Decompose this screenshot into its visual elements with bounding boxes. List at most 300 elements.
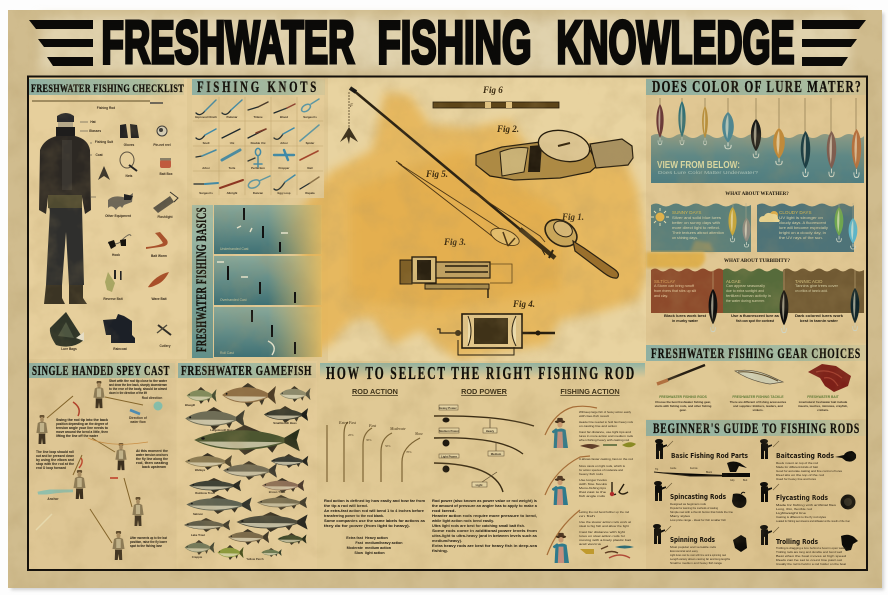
small labels (47, 396, 162, 501)
baitcasting rods: Reel sits on the top of the rod (776, 473, 824, 477)
fig 6 ferrule: Fig 6 (482, 85, 503, 95)
knot names: Egg Loop (278, 191, 291, 195)
fishing action figure 1 (545, 406, 636, 449)
chart: rod power curves: Heavy Power (439, 406, 458, 410)
fishing action figure 2: Use longer hooks (579, 478, 608, 482)
flycasting rods: Made for fishing with artificial flies (776, 503, 837, 507)
icon: flashlight (153, 192, 178, 219)
cloudy days text (779, 210, 828, 240)
angler callouts: Glasses (89, 129, 101, 133)
step 1 text: down in the direction of the lift (109, 391, 148, 395)
step 5 text: spot to the fishing lane (130, 544, 162, 548)
icon: raincoat: Raincoat (113, 347, 128, 351)
icon: lure: There are different of fishing accessories (730, 400, 787, 404)
panel: freshwater fishing checklist (29, 78, 187, 359)
background (319, 361, 646, 570)
spinning rods (670, 535, 747, 565)
icon: red bait: Live/natural freshwater bait include (799, 400, 848, 404)
fishing action figure 3: Use the slower action rods work at (579, 520, 631, 524)
chart: rod action curves: 70% (406, 450, 412, 454)
panel: freshwater gamefish (177, 361, 317, 570)
silt/clay text: from rivers that stirs up silt (654, 289, 696, 293)
sunny days text: Their textures attract attention (672, 231, 724, 235)
spincasting rods: Low price range - Ideal for fish smaller fish (670, 518, 726, 522)
icon: cutlery (157, 325, 171, 348)
knot names: Surgeon's (199, 191, 213, 195)
knot names: Arbor (280, 141, 289, 145)
icon: lure bag (50, 312, 84, 351)
chart: rod action curves: Moderate (389, 426, 406, 431)
sunny days text: Silver and solid blue lures (672, 216, 721, 220)
title text (102, 9, 794, 76)
tannic acid text: Tannins give trees cover (795, 284, 839, 288)
icon: other equipment: Other Equipment (105, 214, 132, 218)
fig 3 cross section: Fig 3. (443, 237, 466, 247)
icon: cutlery: Cutlery (160, 344, 171, 348)
fishing action figure 2: fish angle rods (579, 494, 606, 498)
fish chart: Crappie (192, 555, 203, 559)
knot names: Duncan (253, 191, 263, 195)
heading bar (646, 420, 866, 436)
fish chart: Rainbow Trout (195, 491, 215, 495)
icon: hook: Hook (112, 253, 120, 257)
trolling rods: Trolling is dragging a lure behind a boat in open water (776, 546, 846, 550)
fishing action figure 2: heavy fish rods (579, 472, 604, 476)
weather panel (651, 203, 857, 252)
sunny days text (672, 210, 724, 240)
step 3 text (36, 450, 75, 470)
heading bar (646, 345, 866, 361)
frame (28, 76, 867, 570)
trolling rods: Reels can be set to count line paid out (776, 558, 842, 562)
chart: rod action curves: Extra Fast (338, 420, 357, 425)
icon: rod (655, 365, 712, 412)
cloudy days text: UV light is stronger on (779, 216, 823, 220)
fish chart: Yellow Perch (246, 557, 264, 561)
trolling rods: Best when the boat moves at high speed (776, 554, 846, 558)
fig 6 ferrule (433, 85, 559, 108)
icon: reel (153, 126, 171, 147)
turbidity captions: Use a fluorescent lure as (731, 314, 779, 318)
fishing action figure 1: Heavier line needed to hold fast heavy rods (579, 420, 633, 424)
baitcasting rods: Made for different kinds of bait (776, 465, 818, 469)
orange stain (300, 92, 648, 360)
lures: cloudy (835, 203, 857, 249)
spinning rods: Economical and easy (670, 549, 698, 553)
step 1 text: and draw the line back, sharply downstream (109, 383, 168, 387)
fishing action figure 1: when fishing heavy with casting rod (579, 438, 629, 442)
right chevrons (802, 20, 866, 66)
title text: FRESHWATER (102, 9, 354, 76)
turbidity captions (664, 314, 844, 323)
step 4 text: water tension anchors (135, 453, 168, 457)
casting anglers (36, 381, 144, 560)
rod power text: ultra-light to ultra-heavy (and in between levels such as (432, 534, 537, 538)
silt/clay text (654, 279, 696, 298)
hook line and sinker (340, 92, 358, 144)
sunny days text: better on sunny days with (672, 221, 720, 225)
step 2 text: move around the bend a little, then (56, 430, 109, 434)
heading: SINGLE HANDED SPEY CAST (32, 363, 170, 378)
main rod, fig 1 (350, 88, 618, 278)
knot names: Spider (306, 141, 315, 145)
background (29, 361, 176, 570)
title text: FISHING (378, 9, 532, 76)
knot names: Palomar (226, 115, 238, 119)
fishing action figure 1: Cast far distance, use light tips and (579, 430, 631, 434)
fishing action figure 3 (547, 510, 634, 563)
knot names: Rapala (305, 191, 315, 195)
tannic acid text: TANNIC ACID (795, 279, 822, 284)
knot names: Nail (307, 166, 313, 170)
icon: bait box: Bait Box (160, 172, 173, 176)
icon: cloud (759, 211, 780, 222)
fig 2 reel (476, 124, 633, 180)
rod action text: medium/heavy action (365, 541, 403, 545)
icon: lure bag: Lure Bags (61, 347, 77, 351)
basic fishing rod parts: Guide (670, 467, 677, 470)
icon: sun (651, 208, 669, 226)
fishing action figure 2: Mono-fishing tips (579, 486, 607, 490)
spincasting rods (670, 492, 746, 522)
angler callouts: Coat (95, 153, 103, 157)
cast scene 2 (214, 256, 322, 305)
rod power text: fishing. (432, 549, 448, 553)
chart: rod power curves: Light (476, 483, 482, 487)
icon: rod: Choose the best freshwater fishing gear, (655, 400, 711, 404)
background (646, 78, 867, 343)
turbidity captions: Black lures work best (664, 314, 707, 318)
icon: lure fly (98, 166, 110, 180)
trolling rods (776, 535, 858, 566)
icon: rod: gear. (680, 408, 687, 412)
cast scene 3 (214, 307, 322, 357)
basic fishing rod parts: Basic Fishing Rod Parts (671, 451, 748, 460)
icon: raincoat (103, 314, 135, 351)
background (646, 343, 867, 419)
fig 5 line: Fig 5. (425, 169, 448, 179)
background (177, 361, 317, 570)
rod power text: while light action rods bend easily. (431, 519, 494, 523)
spincasting rods: Spincasting Rods (670, 492, 726, 501)
heading: FRESHWATER FISHING CHECKLIST (31, 83, 184, 95)
fishing action figure 2: with fine hooks (579, 482, 608, 486)
chart: rod power curves: Heavy (486, 429, 495, 433)
rod power text: the amount of pressure an angler has to apply to make a (432, 504, 538, 508)
baitcasting rods: Used for heavy line and lures (776, 477, 817, 481)
fishing rod (32, 101, 163, 110)
knot names: Albright (227, 191, 237, 195)
knot names: Trilene (253, 115, 263, 119)
rod action text: Some companies use the same labels for actions as (324, 519, 425, 523)
icon: gloves (120, 124, 139, 147)
chart: rod action curves: 50% (385, 444, 391, 448)
cast path markers (36, 402, 162, 530)
small labels: water flow (129, 420, 146, 424)
water view from below (651, 134, 864, 183)
sunny days text: on shining days. (672, 236, 698, 240)
fish chart: Lake Trout (191, 533, 205, 537)
rod action text (324, 499, 426, 555)
step 3 text: end O loop forward (36, 466, 67, 470)
spinning rods: Small to medium and heavy fish range (670, 561, 722, 565)
fishing action figure 1: lures in more action and medium rods (579, 434, 634, 438)
chart: rod power curves: Medium (491, 452, 502, 456)
icon: red bait: FRESHWATER BAIT (807, 395, 839, 399)
cloudy days text: the UV rays of the sun. (779, 236, 823, 240)
stain on turbidity gap (646, 252, 705, 268)
cloudy days text: CLOUDY DAYS (779, 210, 812, 215)
column headings: FISHING ACTION (560, 387, 620, 396)
heading bar (646, 79, 866, 95)
step 3 text: by using the elbow and (36, 458, 75, 462)
tannic acid text: on critics of tannic acid. (795, 289, 828, 293)
spincasting rods: Popular for learning the methods of casting (670, 506, 718, 510)
sunny days text: more direct light to reflect. (672, 226, 720, 230)
chart: rod power curves: Medium Power (439, 429, 460, 433)
title banner (29, 9, 866, 76)
step 4 text (135, 449, 168, 469)
step 2 text: lifting the line off the water (56, 434, 98, 438)
fish chart (184, 383, 310, 561)
knot names: Blood (280, 115, 288, 119)
hook line and sinker: F (349, 104, 354, 109)
step 3 text: stop with the rod at the (36, 462, 74, 466)
knot names: Snell (203, 141, 210, 145)
icon: bait worm (146, 232, 168, 258)
view from below text: VIEW FROM BELOW: (657, 160, 740, 171)
knot names: Surgeon's (303, 115, 317, 119)
cast scene 3: Roll Cast (220, 351, 234, 355)
basic fishing rod parts: Ferrule (690, 467, 698, 470)
cloudy days text: bright on a cloudy day, in (779, 231, 826, 235)
heading bar (178, 363, 316, 378)
flycasting rods: Flycasting Rods (776, 493, 828, 502)
rod action text: Slow (354, 551, 363, 555)
fish chart: Walleye (195, 468, 206, 472)
silt/clay text: and clay. (654, 294, 668, 298)
black lures (709, 270, 859, 333)
icon: rod: starts with fishing rods, and other fishing (655, 404, 712, 408)
chart: rod power curves (434, 405, 534, 492)
rod power text: Extra heavy rods are best for heavy fish in deep-sea (432, 544, 538, 548)
fig 1 caption: Fig 1. (561, 212, 584, 222)
turbidity panel (651, 268, 864, 333)
turbidity captions: Dark colored lures work (795, 314, 844, 318)
baitcasting rods (776, 451, 856, 481)
background (29, 78, 187, 359)
left chevrons (29, 20, 93, 66)
icon: red bait: insects, leeches, minnows, crayfish, (798, 404, 848, 408)
step 5 text: position, raise the fly lower (130, 540, 167, 544)
knot names (195, 115, 317, 195)
fig 4 spool (437, 299, 555, 355)
algae text: ALGAE (726, 279, 741, 284)
baitcasting rods: Reels mount on top of the rod (776, 461, 818, 465)
icon: lure (730, 370, 787, 412)
fishing action figure 3: on fish (579, 514, 596, 518)
fishing action figure 1: on casting line and action (579, 424, 617, 428)
rod action text: transferring power to the rod blank. (324, 514, 384, 518)
panel: how to select the right fishing rod (319, 361, 646, 570)
rod power text: Some rods come in additional power levels from (432, 529, 538, 533)
fishing action figure 3: ideal to big fish and allow the fight (579, 524, 629, 528)
rod action text: Extra fast (346, 536, 364, 540)
fig 4 spool: Fig 4. (512, 299, 535, 309)
step 3 text: The line loop should roll (36, 450, 74, 454)
icon: reverse bait (103, 270, 124, 301)
icon: wave bait (148, 272, 169, 301)
small labels: Direction of (129, 416, 148, 420)
fishing rod: Fishing Rod (97, 106, 115, 110)
step 3 text: out and be pressed down (36, 454, 75, 458)
panel: single handed spey cast (29, 361, 176, 570)
step 2 text: position depending on the degree of (56, 422, 109, 426)
knot names: Improved Clinch (195, 115, 217, 119)
fish chart: Smallmouth Bass (273, 421, 297, 425)
trolling rods: Trolling Rods (776, 537, 818, 546)
fishing action figure 3: lures on slow action rods for (579, 534, 625, 538)
panel: beginner's guide to fishing rods (646, 419, 867, 570)
fish chart: Bluegill (185, 403, 195, 407)
heading: FISHING KNOTS (197, 79, 319, 96)
icon: reverse bait: Reverse Bait (103, 297, 124, 301)
turbidity captions: best in tannin water (800, 319, 839, 323)
rod action text: Fast (355, 541, 364, 545)
basic fishing rod parts: Grip (730, 479, 735, 482)
fish chart: Largemouth Bass (210, 428, 234, 432)
step 4 text: the fly line along the (136, 457, 168, 461)
view from below text (657, 160, 758, 176)
turbidity captions: fish can spot the contrast (736, 319, 775, 323)
basic fishing rod parts (654, 451, 750, 482)
icon: lure: FRESHWATER FISHING TACKLE (732, 395, 784, 399)
step 5 text: After moments up to the last (130, 536, 168, 540)
icon: reel: Pin-net reel (153, 143, 171, 147)
knot names: Double Uni (251, 141, 266, 145)
icon: rod: FRESHWATER FISHING RODS (659, 395, 708, 399)
trolling rods: Trolling rods are long and durable and bend well (776, 550, 842, 554)
heading bar (320, 363, 645, 378)
vertical heading: FRESHWATER FISHING BASICS (194, 207, 210, 352)
heading bar (29, 363, 175, 378)
rod action text: the tip a rod will bend. (324, 504, 368, 508)
step 2 text (56, 418, 109, 438)
spincasting rods: Many styles (670, 514, 691, 518)
chart: rod power curves: Light Power (441, 454, 458, 458)
knot names: Arbor (202, 166, 211, 170)
rod action text: medium action (365, 546, 392, 550)
cast scene 1 (214, 205, 322, 254)
column headings: ROD ACTION (352, 387, 398, 396)
rod power text: Heavier action rods require more pressure to bend, (432, 514, 537, 518)
fishing action figure 3: and worms (579, 542, 602, 546)
rod action text: they do for power (from light to heavy). (324, 524, 410, 528)
fig 2 reel: Fig 2. (496, 124, 519, 134)
fig 5 line (396, 161, 545, 249)
algae text: Can appear seasonally (726, 284, 765, 288)
fishing action figure 1: Will keep large fish of heavy action easily (579, 410, 631, 414)
spinning rods: Light lures can be cast with line and a spinning reel (670, 553, 726, 557)
chart: rod action curves (327, 420, 423, 482)
fish chart: Brown Trout (269, 490, 285, 494)
rod action text: light action (365, 551, 385, 555)
trolling rods: Usually the rod is held in a rod holder on the boat (776, 562, 846, 566)
sunny days text: SUNNY DAYS (672, 210, 701, 215)
rod power text: rod bend. (432, 509, 456, 513)
knot names: Perfection (251, 166, 265, 170)
flycasting rods: Lightweight line (776, 511, 806, 515)
fishing action figure 3: moving with a lively plastic bait (579, 538, 631, 542)
heading bar (29, 79, 184, 95)
panel: freshwater fishing gear choices (646, 343, 867, 419)
silhouettes of anglers (653, 439, 779, 545)
step 4 text: back upstream (142, 465, 167, 469)
icon: bait box (160, 158, 173, 176)
step 4 text: rod, then casting (136, 461, 168, 465)
tannic acid text (795, 279, 839, 293)
cloudy days text: lure will become especially (779, 226, 828, 230)
fishing action figure 2: for action species of moderate and (579, 468, 623, 472)
heading: FRESHWATER GAMEFISH (181, 363, 312, 378)
algae text: due to extra sunlight and (726, 289, 764, 293)
silt/clay text: A Storm can bring runoff (654, 284, 694, 288)
chart: rod action curves: Slow (415, 431, 423, 436)
spinning rods: Most popular and versatile rods (670, 545, 717, 549)
fishing action figure 2: More casts on light rods, which is (579, 464, 626, 468)
algae text (726, 279, 771, 303)
column headings: ROD POWER (461, 387, 508, 396)
panel: fishing knots (192, 78, 325, 198)
rod power text: medium/heavy). (432, 539, 462, 543)
lures: sunny (728, 203, 751, 247)
baitcasting rods: Good for accurate casting and fine control of lures (776, 469, 842, 473)
rod action text: Rod action is defined by how easily and how far from (324, 499, 426, 503)
step 2 text: Swing the rod tip into the back (56, 418, 109, 422)
step 1 text: to the rear of the body, should be aimed (109, 387, 168, 391)
icon: nets: Nets (126, 174, 133, 178)
cast scene 1: Underhanded Cast (220, 247, 249, 251)
turbidity captions: in murky water (672, 319, 699, 323)
baitcasting rods: Baitcasting Rods (776, 451, 834, 460)
icon: wave bait: Wave Bait (151, 297, 167, 301)
background (192, 78, 324, 198)
icon: red bait: crickets. (817, 408, 829, 412)
fishing action figure 3: Cast far distance with light (579, 530, 625, 534)
fish chart: Salmon (193, 512, 203, 516)
icon: nets (120, 152, 137, 178)
small labels: Anchor (47, 497, 59, 501)
icon: other equipment (105, 193, 133, 218)
chart: rod action curves: 30% (366, 438, 372, 442)
flycasting rods: Long, thin, flexible rod (776, 507, 812, 511)
basic fishing rod parts: Blank (706, 471, 713, 474)
rod action text: Moderate (347, 546, 363, 550)
fishing action figure 2: It allows faster casting, fast on the rod (579, 457, 633, 461)
knot grid (193, 97, 323, 195)
spinning rods: Spinning Rods (670, 535, 715, 544)
fishing action figure 2: that cast to the (579, 490, 606, 494)
icon: red bait (798, 364, 851, 412)
column headings (352, 387, 620, 396)
knot names: Dropper (279, 166, 290, 170)
inner content ground (28, 77, 867, 570)
icon: lure: sinkers. (753, 408, 764, 412)
heading: what about weather: WHAT ABOUT WEATHER? (725, 192, 789, 197)
angler figure (39, 113, 91, 304)
icon: lure: and supplies: Bobbers, leaders, and (733, 404, 783, 408)
lure row (656, 98, 861, 177)
